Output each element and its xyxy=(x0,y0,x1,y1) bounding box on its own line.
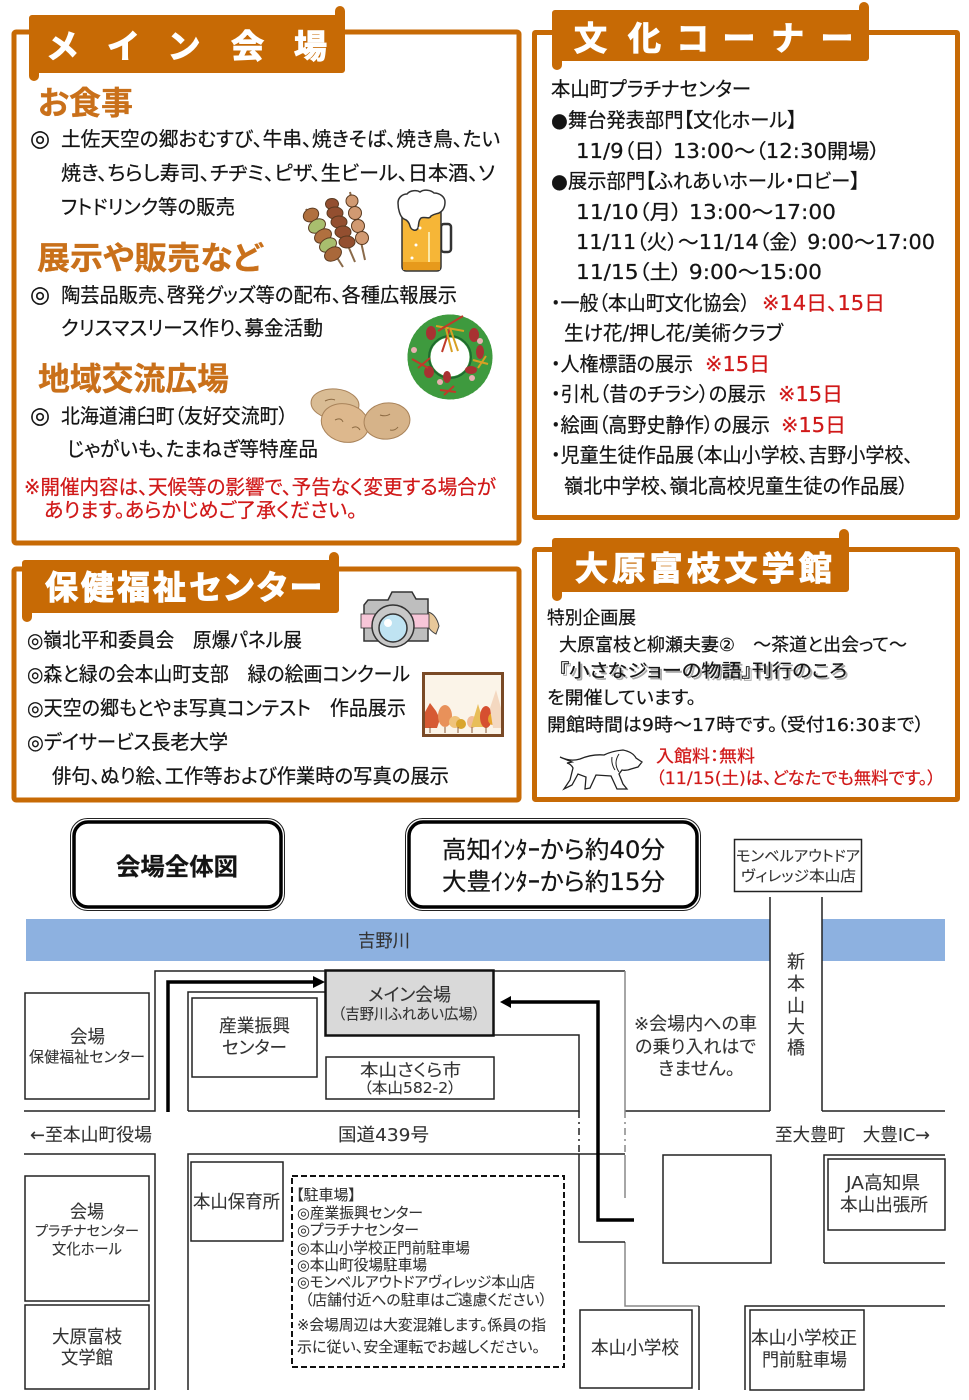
box: school front gate parking: 本山小学校正 xyxy=(751,1328,857,1349)
label box: mont-bell outdoor village: モンベルアウトドア xyxy=(736,847,860,865)
text block: exhibits: ◎デイサービス長老大学 xyxy=(27,730,228,754)
text block: exhibits: ◎天空の郷もとやま写真コンテスト 作品展示 xyxy=(27,696,406,720)
ribbon heading: health and welfare center: 保健福祉センター xyxy=(45,568,322,607)
text block: local products: じゃがいも、たまねぎ等特産品 xyxy=(67,437,318,461)
bridge: Shin-Motoyama bridge xyxy=(770,897,822,1111)
text block: admission xyxy=(656,747,936,789)
box: industry promotion center: 産業振興 xyxy=(219,1016,290,1037)
icon: yakitori skewers xyxy=(301,192,368,267)
callout: travel time from interchanges: 大豊ｲﾝﾀｰから約15分 xyxy=(442,868,665,896)
venue box: platinum center culture hall: 文化ホール xyxy=(52,1240,122,1258)
box: main venue highlighted xyxy=(326,970,494,1036)
text block: exhibit items: ※15日 xyxy=(778,382,843,406)
bridge: Shin-Motoyama bridge: 山 xyxy=(787,996,805,1017)
text block: exhibits xyxy=(27,628,449,788)
label box: mont-bell outdoor village xyxy=(734,840,862,892)
road labels: route 439: 至大豊町 大豊IC→ xyxy=(775,1125,930,1146)
text block: exhibit items: 嶺北中学校、嶺北高校児童生徒の作品展） xyxy=(564,474,908,498)
text block: special exhibition: 『小さなジョーの物語』刊行のころ xyxy=(561,663,849,684)
text block: special exhibition xyxy=(547,608,924,736)
box: Motoyama nursery school xyxy=(191,1162,283,1241)
text block: venue and stage schedule: 11/15（土） 9:00～15:00 xyxy=(576,260,822,284)
venue box: platinum center culture hall: プラチナセンター xyxy=(35,1224,139,1240)
text block: food list: 土佐天空の郷おむすび、牛串、焼きそば、焼き鳥、たい xyxy=(61,127,500,151)
box: Motoyama elementary school: 本山小学校 xyxy=(591,1338,679,1359)
text block: venue and stage schedule: 11/9（日） 13:00～（12:30開場） xyxy=(576,139,880,163)
dashed box: parking information: ◎プラチナセンター xyxy=(297,1221,419,1239)
title box: venue overview map xyxy=(70,818,284,910)
dashed box: parking information: ※会場周辺は大変混雑します。係員の指 xyxy=(297,1316,546,1334)
venue box: Ohara Tomie literature museum xyxy=(25,1305,149,1389)
heading: community plaza: 地域交流広場 xyxy=(38,360,229,398)
box: JA Kochi Motoyama branch: 本山出張所 xyxy=(840,1195,928,1216)
text block: venue and stage schedule: 11/10（月） 13:00～17:00 xyxy=(576,200,836,224)
text block: venue and stage schedule: 11/11（火）～11/14（金） 9:00～17:00 xyxy=(576,230,935,254)
dashed box: parking information: 【駐車場】 xyxy=(296,1186,356,1204)
box: school front gate parking xyxy=(750,1310,864,1390)
text block: local products xyxy=(30,403,318,461)
text block: exhibit items: ※14日、15日 xyxy=(762,291,885,315)
icon: christmas wreath xyxy=(409,316,491,398)
venue box: health and welfare center: 会場 xyxy=(70,1027,105,1048)
panel: health and welfare center xyxy=(14,552,519,800)
ribbon heading: main venue: メイン会場 xyxy=(48,27,327,66)
label box: mont-bell outdoor village: ヴィレッジ本山店 xyxy=(741,867,856,885)
dashed box: parking information: ◎本山町役場駐車場 xyxy=(297,1256,427,1274)
text block: venue and stage schedule: ●舞台発表部門【文化ホール】 xyxy=(551,108,797,132)
text block: exhibit items xyxy=(551,291,913,498)
panel: culture corner xyxy=(534,2,958,518)
box: main venue highlighted: メイン会場 xyxy=(368,985,451,1006)
callout: travel time from interchanges: 高知ｲﾝﾀｰから約40分 xyxy=(442,836,665,864)
box: JA Kochi Motoyama branch xyxy=(828,1159,945,1230)
river: Yoshino River: 吉野川 xyxy=(358,931,410,952)
text block: special exhibition: 開館時間は9時～17時です。（受付16:30まで） xyxy=(547,715,924,736)
bridge: Shin-Motoyama bridge: 本 xyxy=(787,974,805,995)
icon: autumn trees painting xyxy=(424,674,502,736)
venue box: platinum center culture hall xyxy=(25,1176,149,1301)
text block: exhibits list xyxy=(30,282,457,340)
bridge: Shin-Motoyama bridge: 新 xyxy=(787,952,805,973)
road labels: route 439: ←至本山町役場 xyxy=(30,1125,152,1146)
dashed box: parking information xyxy=(292,1176,564,1367)
text block: venue and stage schedule: 本山町プラチナセンター xyxy=(551,77,751,101)
text block: venue and stage schedule xyxy=(551,77,935,284)
box: Motoyama nursery school: 本山保育所 xyxy=(193,1192,280,1213)
map: venue overview xyxy=(24,818,945,1390)
text block: special exhibition: を開催しています。 xyxy=(547,688,696,709)
road labels: route 439 xyxy=(30,1125,930,1146)
dashed box: parking information: ◎モンベルアウトドアヴィレッジ本山店 xyxy=(297,1273,535,1291)
note: no vehicles in venue: ※会場内への車 xyxy=(634,1014,757,1035)
arrow: route to main venue from west xyxy=(168,976,325,1112)
venue box: health and welfare center: 保健福祉センター xyxy=(29,1048,145,1066)
box: Motoyama Sakura market: （本山582-2） xyxy=(364,1079,456,1097)
text block: food list: フトドリンク等の販売 xyxy=(61,195,235,219)
panel: main venue xyxy=(14,6,519,543)
ribbon heading: literature museum: 大原富枝文学館 xyxy=(575,549,832,588)
ribbon heading: literature museum xyxy=(552,529,849,601)
text block: food list: 焼き、ちらし寿司、チヂミ、ピザ、生ビール、日本酒、ソ xyxy=(61,161,495,185)
box: Motoyama Sakura market xyxy=(326,1057,494,1099)
arrow: route to main venue from east xyxy=(500,996,634,1220)
text block: exhibits: 俳句、ぬり絵、工作等および作業時の写真の展示 xyxy=(52,764,449,788)
dashed box: parking information: 示に従い、安全運転でお越しください。 xyxy=(297,1338,540,1356)
block: unlabeled building xyxy=(663,1155,771,1263)
text block: exhibit items: ・引札（昔のチラシ）の展示 xyxy=(551,382,766,406)
dashed box: parking information: ◎産業振興センター xyxy=(297,1204,423,1222)
text block: food list: ◎ xyxy=(30,126,50,152)
ribbon heading: culture corner xyxy=(552,2,869,70)
ribbon heading: main venue xyxy=(29,6,345,81)
text block: exhibit items: ・絵画（高野史静作）の展示 xyxy=(551,413,770,437)
venue box: Ohara Tomie literature museum: 文学館 xyxy=(61,1348,113,1369)
note: no vehicles in venue: きません。 xyxy=(658,1059,735,1080)
text block: admission: 入館料：無料 xyxy=(656,747,755,767)
text block: admission: （11/15(土)は、どなたでも無料です。） xyxy=(656,769,936,789)
text block: exhibit items: ・児童生徒作品展（本山小学校、吉野小学校、 xyxy=(551,443,913,467)
text block: exhibit items: ・一般（本山町文化協会） xyxy=(551,291,750,315)
text block: exhibits list: ◎ xyxy=(30,282,50,308)
dashed box: parking information: ◎本山小学校正門前駐車場 xyxy=(297,1239,470,1257)
note: no vehicles in venue xyxy=(634,1014,757,1080)
box: main venue highlighted: （吉野川ふれあい広場） xyxy=(338,1005,480,1023)
box: Motoyama Sakura market: 本山さくら市 xyxy=(360,1061,461,1081)
venue box: platinum center culture hall: 会場 xyxy=(70,1202,104,1223)
ribbon heading: health and welfare center xyxy=(22,552,339,622)
text block: local products: 北海道浦臼町（友好交流町） xyxy=(61,404,288,428)
text block: exhibit items: 生け花/押し花/美術クラブ xyxy=(564,321,784,345)
box: industry promotion center: センター xyxy=(222,1038,287,1059)
text block: exhibit items: ※15日 xyxy=(781,413,846,437)
icon: camera xyxy=(361,592,439,647)
panel: Ohara Tomie literature museum xyxy=(534,529,958,800)
box: school front gate parking: 門前駐車場 xyxy=(762,1350,847,1371)
text block: special exhibition: 『小さなジョーの物語』刊行のころ xyxy=(559,661,847,682)
road lines north of route 439 xyxy=(24,971,945,1390)
box: industry promotion center xyxy=(192,998,317,1077)
text block: exhibits: ◎嶺北平和委員会 原爆パネル展 xyxy=(27,628,302,652)
callout: schedule change notice: ※開催内容は、天候等の影響で、予告なく変更する場合が xyxy=(24,475,496,499)
callout: schedule change notice xyxy=(24,475,496,522)
text block: special exhibition: 大原富枝と柳瀬夫妻② ～茶道と出会って～ xyxy=(559,635,907,656)
text block: exhibits: ◎森と緑の会本山町支部 緑の絵画コンクール xyxy=(27,662,410,686)
bridge: Shin-Motoyama bridge: 大 xyxy=(787,1017,805,1038)
venue box: Ohara Tomie literature museum: 大原富枝 xyxy=(52,1327,122,1348)
text block: exhibits list: クリスマスリース作り、募金活動 xyxy=(61,316,323,340)
icon: potatoes xyxy=(310,387,412,448)
road labels: route 439: 国道439号 xyxy=(338,1125,429,1146)
callout: schedule change notice: あります。あらかじめご了承ください。 xyxy=(44,498,357,522)
heading: exhibits and sales: 展示や販売など xyxy=(37,239,264,277)
heading: food: お食事 xyxy=(38,84,133,122)
text block: exhibit items: ・人権標語の展示 xyxy=(551,352,693,376)
box: JA Kochi Motoyama branch: JA高知県 xyxy=(845,1173,920,1194)
text block: exhibit items: ※15日 xyxy=(705,352,770,376)
text block: food list xyxy=(30,126,500,219)
venue box: health and welfare center xyxy=(25,993,149,1099)
text block: venue and stage schedule: ●展示部門【ふれあいホール・ロビー】 xyxy=(551,169,860,193)
text block: exhibits list: 陶芸品販売、啓発グッズ等の配布、各種広報展示 xyxy=(61,283,457,307)
dashed box: parking information: （店舗付近への駐車はご遠慮ください） xyxy=(305,1291,547,1309)
title box: venue overview map: 会場全体図 xyxy=(116,853,238,881)
text block: local products: ◎ xyxy=(30,403,50,429)
bridge: Shin-Motoyama bridge: 橋 xyxy=(787,1038,805,1059)
note: no vehicles in venue: の乗り入れはで xyxy=(635,1037,756,1058)
icon: dog outline xyxy=(560,750,642,789)
river: Yoshino River xyxy=(26,919,945,961)
callout: travel time from interchanges xyxy=(406,818,700,910)
text block: special exhibition: 特別企画展 xyxy=(547,608,636,629)
box: Motoyama elementary school xyxy=(580,1310,692,1388)
icon: beer mug xyxy=(398,190,451,271)
ribbon heading: culture corner: 文化コーナー xyxy=(574,19,853,58)
